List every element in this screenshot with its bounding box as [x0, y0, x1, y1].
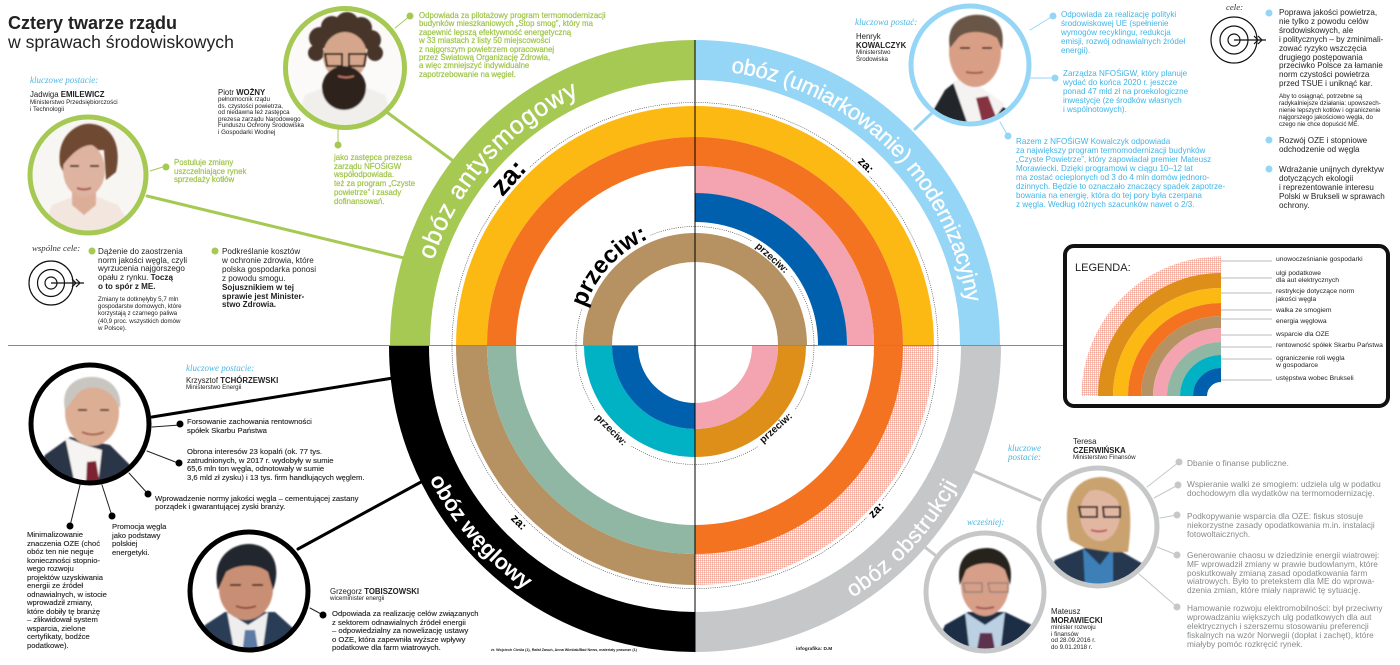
text: Kowalczyk Czyste Powietrze: dzinnych. Będzie to oznaczało znaczący spadek zapotrze- — [1016, 182, 1225, 191]
label: za top right: za: — [855, 154, 877, 176]
text: Wozny Stop smog: zapewnić lepszą efektywność energetyczną — [419, 28, 571, 37]
label: za big: za: — [485, 153, 532, 201]
text: coal point promotion: energetyki. — [112, 548, 149, 556]
text: Morawiecki name: Mateusz — [1051, 607, 1080, 616]
text: finance point electromobility: miałyby pomóc rozkręcić rynek. — [1187, 639, 1303, 649]
text: finance point OZE: fotowoltaicznych. — [1187, 529, 1250, 539]
text: goal EU directives: dotyczących ekologii — [1279, 174, 1353, 183]
text: coal point OZE: które dobiły tę branżę — [27, 606, 100, 616]
portrait: Emilewicz — [30, 117, 146, 235]
text: goal one note — [98, 296, 182, 332]
text: Kowalczyk NFOSiGW: wydać do końca 2020 r. jeszcze — [1063, 78, 1177, 87]
text: coal point OZE: obóz ten nie neguje — [27, 547, 94, 556]
text: Wozny Stop smog: budynków mieszkaniowych „Stop smog”, który ma — [419, 19, 593, 28]
text: goal one note: w Polsce). — [98, 325, 127, 332]
text: goal one: norm jakości węgla, czyli — [98, 256, 187, 265]
text: finance point electromobility: Hamowanie rozwoju elektromobilności: był przeciwny — [1187, 603, 1383, 613]
text: Tobiszowski name: Grzegorz TOBISZOWSKI — [330, 587, 419, 596]
text: Czerwinska name: CZERWIŃSKA — [1073, 446, 1126, 455]
connector dots — [66, 10, 1272, 618]
text: coal point mines: Obrona interesów 23 kopalń (ok. 77 tys. — [187, 447, 322, 456]
text: kluczowe postacie coal: kluczowe postacie: — [186, 363, 254, 373]
text: coal point promotion: polskiej — [112, 539, 137, 548]
text: Kowalczyk NFOSiGW: ponad 47 mld zł na proekologiczne — [1063, 87, 1188, 96]
text: coal point OZE: projektów uzyskiwania — [27, 572, 103, 582]
text: goal air quality: norm czystości powietrza — [1279, 70, 1369, 79]
text: Emilewicz postulate — [174, 158, 246, 184]
text: Czerwinska ministry: Ministerstwo Finansów — [1073, 454, 1136, 461]
text: Wozny role: od niedawna też zastępca — [218, 109, 290, 116]
text: Kowalczyk name — [856, 32, 906, 50]
text: Wozny Stop smog: a więc zmniejszyć indywidualne — [419, 61, 529, 70]
text: Tobiszowski role: wiceminister energii — [330, 595, 384, 602]
label: przeciw big: przeciw: — [574, 228, 646, 308]
legend labels: restrykcje dotyczące norm — [1276, 288, 1354, 295]
text: finance point OZE: Podkopywanie wsparcia dla OZE: fiskus stosuje — [1187, 511, 1363, 521]
text: goal two: sprawie jest Minister- — [222, 292, 304, 301]
portrait: Tobiszowski — [190, 532, 308, 655]
text: Kowalczyk NFOSiGW: Zarządza NFOŚiGW, który planuje — [1063, 69, 1187, 78]
text: goal two: polska gospodarka ponosi — [222, 265, 316, 274]
text: finance point wind — [1187, 550, 1379, 595]
title: w sprawach środowiskowych — [8, 32, 234, 52]
portrait: Kowalczyk — [911, 6, 1029, 130]
text: kluczowe postacie finance: kluczowe — [1008, 443, 1041, 453]
text: coal point OZE: wsparcia, zielone — [27, 624, 86, 632]
text: goal air quality: drugiego postępowania — [1279, 53, 1363, 62]
dotted guide circles — [452, 102, 938, 588]
text: coal point OZE: certyfikaty, bodźce — [27, 632, 90, 641]
text: Morawiecki name: MORAWIECKI — [1051, 616, 1103, 625]
text: coal point quality norm: Wprowadzenie normy jakości węgla – cementującej zastany — [155, 494, 358, 503]
text: coal point profitability: Forsowanie zachowania rentowności — [187, 417, 312, 426]
legend labels: rentowność spółek Skarbu Państwa — [1276, 342, 1383, 349]
legend labels: ulgi podatkowe — [1276, 270, 1321, 277]
text: Czerwinska name: Teresa — [1073, 437, 1096, 446]
legend labels: walka ze smogiem — [1276, 307, 1332, 314]
text: goal one: Dążenie do zaostrzenia — [98, 247, 183, 256]
text: Emilewicz ministry: i Technologii — [30, 106, 64, 113]
text: kluczowe postacie finance — [1008, 443, 1041, 462]
text: Czerwinska name — [1073, 437, 1126, 455]
text: Wozny Stop smog: zapotrzebowanie na węgiel. — [419, 70, 516, 79]
text: goal air quality — [1279, 8, 1383, 88]
text: goal air quality note: radykalniejsze działania: upowszech- — [1279, 100, 1381, 107]
text: finance point wind: poskutkowały zmianą zasad opodatkowania farm — [1187, 568, 1367, 578]
text: Kowalczyk ministry: Środowiska — [856, 56, 888, 63]
text: Wozny NFOSiGW: też za program „Czyste — [334, 179, 415, 188]
legend labels: dla aut elektrycznych — [1276, 277, 1339, 284]
text: Wozny NFOSiGW: współodpowiada. — [334, 170, 394, 179]
text: wczesniej: wcześniej: — [967, 517, 1004, 527]
text: goal two — [222, 247, 316, 309]
text: finance point electromobility: wprowadzaniu większych ulg podatkowych dla aut — [1187, 612, 1371, 622]
text: goal two: z powodu smogu. — [222, 274, 285, 283]
camp name: oboz antysmogowy: obóz antysmogowy — [422, 84, 575, 258]
text: Kowalczyk EU policy: Odpowiada za realizację polityki — [1061, 10, 1176, 19]
text: goal EU directives: ochrony. — [1279, 201, 1309, 210]
text: goal air quality note — [1279, 93, 1381, 128]
text: goal air quality: nie tylko z powodu celów — [1279, 17, 1369, 26]
text: goal EU directives: Wdrażanie unijnych dyrektyw — [1279, 165, 1384, 174]
text: Emilewicz ministry — [30, 99, 118, 113]
text: goal air quality note: czego nie chce dopuścić ME. — [1279, 121, 1359, 128]
label: za bottom right: za: — [865, 499, 887, 521]
text: goal one note: korzystają z czarnego paliwa — [98, 310, 177, 317]
text: goal air quality note: nienie lepszych kotłów i ograniczenie — [1279, 107, 1380, 114]
text: Tobiszowski duties — [332, 609, 479, 652]
text: Kowalczyk Czyste Powietrze: ma zostać ocieplonych od 3 do 4 mln domów jednoro- — [1016, 173, 1209, 182]
text: Tchorzewski name: Krzysztof TCHÓRZEWSKI — [186, 376, 278, 385]
text: Wozny role: pełnomocnik rządu — [218, 96, 270, 103]
text: goal air quality: i politycznych – by zminimali- — [1279, 35, 1383, 44]
text: finance point wind: MF wprowadził zmiany w prawie budowlanym, które — [1187, 559, 1378, 569]
text: Wozny Stop smog: z najgorszym powietrzem opracowanej — [419, 45, 554, 54]
text: coal point mines — [187, 447, 364, 482]
text: Emilewicz postulate: uszczelniające rynek — [174, 167, 246, 176]
text: coal point OZE: konieczności stopnio- — [27, 556, 100, 564]
portrait: Czerwinska — [1039, 468, 1158, 590]
text: kluczowa postac: kluczowa postać: — [855, 17, 917, 27]
text: finance point wind: wiatrowych. Było to pretekstem dla ME do wprowa- — [1187, 576, 1375, 586]
text: Tobiszowski duties: Odpowiada za realizację celów związanych — [332, 609, 479, 618]
text: goal OZE — [1279, 136, 1367, 154]
connector lines — [70, 16, 1179, 615]
camp name: oboz modernizacyjny: obóz (umiarkowanie) modernizacyjny — [732, 58, 978, 300]
text: Kowalczyk name: Henryk — [856, 32, 881, 41]
text: wspolne cele: wspólne cele: — [32, 243, 80, 253]
text: Morawiecki role — [1051, 624, 1096, 651]
text: coal point mines: 3,6 mld zł zysku) i 13 tys. firm handlujących węglem. — [187, 472, 364, 482]
text: goal two: Podkreślanie kosztów — [222, 247, 300, 256]
text: Kowalczyk Czyste Powietrze: Morawiecki. Dzięki programowi w ciągu 10–12 lat — [1016, 164, 1193, 173]
text: goal two: w ochronie zdrowia, które — [222, 256, 314, 265]
footer sources: źr. Wojciech Cieśla (1), Rafał Zasuń, Anna Wieślak/Bad News, materiały prasowe (1) — [491, 648, 637, 652]
portrait: Tchorzewski — [31, 365, 149, 490]
text: Kowalczyk NFOSiGW: i wspólnotowych). — [1063, 105, 1127, 114]
text: coal point OZE: wprowadził zmiany, — [27, 598, 93, 607]
panel: camp antysmogowy quarter — [410, 60, 695, 345]
text: goal EU directives: Polski w Brukseli w sprawach — [1279, 192, 1385, 201]
text: Wozny NFOSiGW: jako zastępca prezesa — [334, 153, 412, 162]
text: Wozny role: Funduszu Ochrony Środowiska — [218, 122, 304, 129]
text: goal one note: Zmiany te dotknęłyby 5,7 mln — [98, 296, 178, 303]
text: coal point quality norm: porządek i gwarantującej zyski branży. — [155, 502, 285, 511]
text: goal air quality: zować ryzyko wszczęcia — [1279, 44, 1367, 53]
text: Emilewicz ministry: Ministerstwo Przedsiębiorczości — [30, 99, 118, 106]
text: coal point OZE: – zlikwidował system — [27, 615, 98, 624]
text: finance point budget: Dbanie o finanse publiczne. — [1187, 458, 1289, 468]
text: Tobiszowski duties: – odpowiedzialny za nowelizację ustawy — [332, 626, 468, 635]
text: goal air quality: przed TSUE i uniknąć kar. — [1279, 79, 1372, 88]
footer credit: infografika: D.M — [796, 647, 832, 652]
legend labels: unowocześnianie gospodarki — [1276, 256, 1363, 263]
text: Kowalczyk EU policy: środowiskowej UE (spełnienie — [1061, 19, 1169, 28]
legend labels: wsparcie dla OZE — [1276, 331, 1329, 338]
text: goal one note: gospodarstw domowych, które — [98, 303, 182, 310]
text: Wozny NFOSiGW: powietrze” i zasady — [334, 188, 401, 197]
text: finance point smog: Wspieranie walki ze smogiem: udziela ulg w podatku — [1187, 479, 1381, 489]
text: goal air quality: przeciwko Polsce za łamanie — [1279, 61, 1383, 70]
text: coal point OZE: wego rozwoju — [27, 564, 74, 573]
text: Wozny Stop smog — [418, 11, 606, 79]
text: finance point electromobility: fiskalnych na wzór Norwegii (dopłat i zachęt), które — [1187, 630, 1374, 640]
legend labels: jakości węgla — [1276, 296, 1316, 303]
text: cele: cele: — [1226, 2, 1243, 12]
text: Kowalczyk EU policy — [1061, 10, 1186, 55]
text: coal point mines: zatrudnionych, w 2017 r. wydobyły w sumie — [187, 456, 334, 464]
legend labels: energia węglowa — [1276, 318, 1327, 325]
text: Wozny NFOSiGW: zarządu NFOŚiGW — [334, 162, 401, 171]
text: coal point promotion — [112, 522, 166, 556]
label: za bottom left: za: — [508, 511, 530, 533]
text: Wozny NFOSiGW: dofinansowań. — [334, 197, 385, 206]
legend box — [1065, 246, 1388, 406]
text: Kowalczyk EU policy: wymogów recyklingu, redukcja — [1061, 28, 1171, 37]
text: goal OZE: Rozwój OZE i stopniowe — [1279, 136, 1367, 145]
text: Wozny Stop smog: przez Światową Organizację Zdrowia, — [419, 53, 550, 62]
label halos — [487, 153, 888, 534]
label: przeciw bottom right: przeciw: — [758, 411, 795, 446]
text: coal point profitability: spółek Skarbu Państwa — [187, 426, 267, 435]
text: coal point OZE: podatkowe). — [27, 640, 69, 650]
text: kluczowe postacie finance: postacie: — [1008, 452, 1041, 462]
text: goal air quality note: najgorszego jakościowo węgla, do — [1279, 114, 1373, 121]
legend labels — [1276, 256, 1383, 382]
portrait: Morawiecki — [926, 533, 1044, 655]
text: Kowalczyk Czyste Powietrze: z węgla. Według różnych szacunków nawet o 2/3. — [1016, 200, 1194, 209]
camp name: oboz obstrukcji: obóz obstrukcji — [848, 478, 958, 596]
text: goal air quality note: Aby to osiągnąć, potrzebne są — [1279, 93, 1362, 100]
text: finance point OZE: niekorzystne zasady opodatkowania m.in. instalacji — [1187, 520, 1375, 530]
text: Morawiecki role: minister rozwoju — [1051, 624, 1096, 631]
text: Kowalczyk Czyste Powietrze — [1016, 136, 1225, 209]
legend labels: ustępstwa wobec Brukseli — [1276, 375, 1354, 382]
legend title: LEGENDA: — [1075, 262, 1131, 274]
text: coal point promotion: Promocja węgla — [112, 522, 166, 531]
text: Emilewicz postulate: Postuluje zmiany — [174, 158, 233, 167]
text: Morawiecki role: od 28.09.2016 r. — [1051, 637, 1096, 644]
horizontal axis — [8, 344, 1063, 346]
text: kluczowe postacie left: kluczowe postacie: — [30, 75, 98, 85]
text: Tobiszowski duties: o OZE, która zapewniła wyższe wpływy — [332, 634, 465, 644]
text: Morawiecki name — [1051, 607, 1103, 625]
text: Kowalczyk EU policy: energii). — [1061, 46, 1090, 55]
text: goal one — [98, 247, 187, 291]
text: Kowalczyk ministry: Ministerstwo — [856, 49, 890, 56]
text: Kowalczyk ministry — [856, 49, 890, 63]
title — [8, 13, 234, 52]
text: goal air quality: Poprawa jakości powietrza, — [1279, 8, 1377, 17]
text: goal one note: (40,9 proc. wszystkich domów — [98, 318, 181, 325]
text: goal one: o to spór z ME. — [98, 282, 156, 291]
text: coal point OZE: odnawialnych, w istocie — [27, 590, 107, 598]
text: Kowalczyk Czyste Powietrze: „Czyste Powietrze”, który zapowiadał premier Mateusz — [1016, 155, 1211, 164]
text: Tchorzewski ministry: Ministerstwo Energii — [186, 384, 241, 391]
text: goal OZE: odchodzenie od węgla — [1279, 145, 1360, 154]
icon: target goals — [1211, 17, 1266, 63]
text: Wozny role: ds. czystości powietrza, — [218, 103, 283, 110]
text: Emilewicz name: Jadwiga EMILEWICZ — [30, 90, 105, 99]
panel: camp modernizacyjny quarter — [695, 60, 980, 345]
center vertical axis — [694, 40, 696, 652]
text: goal one: wyrzucenia najgorszego — [98, 264, 185, 273]
text: coal point OZE: Minimalizowanie — [27, 530, 83, 539]
text: Wozny Stop smog: Odpowiada za pilotażowy program termomodernizacji — [419, 11, 606, 20]
text: Emilewicz postulate: sprzedaży kotłów — [174, 175, 234, 184]
text: Kowalczyk Czyste Powietrze: Razem z NFOŚiGW Kowalczyk odpowiada — [1016, 137, 1170, 146]
text: Morawiecki role: i finansów — [1051, 631, 1079, 638]
text: finance point smog — [1187, 479, 1381, 498]
text: coal point OZE: znaczenia OZE (choć — [27, 538, 100, 548]
legend labels: w gospodarce — [1276, 362, 1318, 369]
portrait: Wozny — [285, 8, 405, 128]
text: finance point wind: Generowanie chaosu w dziedzinie energii wiatrowej: — [1187, 550, 1379, 560]
text: Kowalczyk Czyste Powietrze: bowania na energię, która do tej pory była czerpana — [1016, 191, 1202, 200]
panel: camp weglowy quarter — [409, 346, 695, 632]
text: goal EU directives — [1279, 165, 1385, 210]
text: finance point OZE — [1187, 511, 1375, 539]
panel: camp obstrukcji quarter — [695, 346, 981, 632]
label: przeciw top right: przeciw: — [753, 241, 790, 276]
text: Wozny NFOSiGW — [334, 153, 415, 206]
text: goal two: Sojusznikiem w tej — [222, 283, 294, 292]
label: przeciw bottom left: przeciw: — [593, 412, 629, 448]
text: Wozny Stop smog: w 33 miastach z listy 50 miejscowości — [419, 36, 550, 45]
text: Wozny name: Piotr WOŻNY — [218, 88, 265, 97]
text: goal one: opału z rynku. Toczą — [98, 273, 173, 282]
text: Wozny role: prezesa zarządu Narodowego — [218, 116, 301, 123]
text: Kowalczyk Czyste Powietrze: za największy program termomodernizacji budynków — [1016, 146, 1205, 155]
text: coal point quality norm — [155, 494, 358, 511]
text: Tobiszowski duties: z sektorem odnawialnych źródeł energii — [332, 618, 466, 626]
text: Morawiecki role: do 9.01.2018 r. — [1051, 644, 1092, 651]
text: coal point OZE — [26, 530, 107, 650]
text: coal point profitability — [187, 417, 312, 435]
text: goal air quality: środowiskowych, ale — [1279, 26, 1353, 35]
text: Kowalczyk NFOSiGW: inwestycje (ze środków własnych — [1063, 96, 1182, 105]
text: coal point promotion: jako podstawy — [112, 530, 160, 540]
text: Kowalczyk name: KOWALCZYK — [856, 41, 906, 50]
legend labels: ograniczenie roli węgla — [1276, 355, 1345, 362]
text: finance point smog: dochodowym dla wydatków na termomodernizację. — [1187, 488, 1375, 498]
text: finance point wind: dzenia zmian, które miały naprawić tę sytuację. — [1187, 585, 1360, 595]
text: finance point electromobility — [1187, 603, 1383, 649]
camp name: oboz weglowy: obóz węglowy — [432, 476, 532, 589]
text: goal two: stwo Zdrowia. — [222, 300, 276, 309]
text: Tobiszowski duties: podatkowe dla farm wiatrowych. — [332, 643, 441, 652]
text: coal point mines: 65,6 mln ton węgla, odnotowały w sumie — [187, 464, 324, 473]
text: goal EU directives: i reprezentowanie interesu — [1279, 183, 1374, 192]
text: Kowalczyk EU policy: emisji, rozwój odnawialnych źródeł — [1061, 37, 1185, 46]
title: Cztery twarze rządu — [8, 13, 177, 33]
text: finance point electromobility: elektrycznych i szerszemu stosowaniu preferencji — [1187, 621, 1369, 631]
text: Wozny role — [218, 96, 304, 136]
text: Kowalczyk NFOSiGW — [1063, 68, 1188, 114]
text: Wozny role: i Gospodarki Wodnej — [218, 129, 275, 136]
text: coal point OZE: energii ze źródeł — [27, 581, 83, 590]
icon: target shared goals — [29, 261, 84, 305]
